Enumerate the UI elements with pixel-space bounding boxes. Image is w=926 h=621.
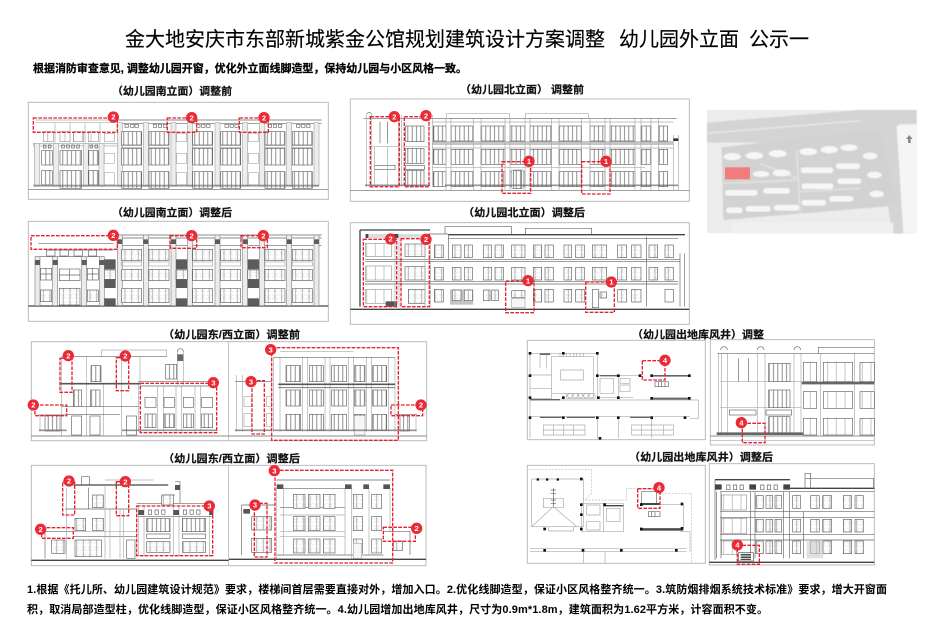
callout 2: upper middle: 2 xyxy=(123,477,127,486)
callout 2: second tower xyxy=(401,234,432,307)
callout 2: left tower: 2 xyxy=(392,112,396,121)
callout 2: right roof: 2 xyxy=(261,231,265,240)
panel: ventilation shaft before, floor plan xyxy=(527,340,705,440)
title xyxy=(125,28,809,51)
callout 1: entrance xyxy=(506,275,534,313)
callout 4: shaft location on plan xyxy=(638,482,665,508)
callout 2: right roof xyxy=(241,230,269,248)
callout 2: left tower: 2 xyxy=(389,235,393,244)
callout 4: new shaft: 4 xyxy=(735,541,740,550)
callout 3: right wing xyxy=(140,377,219,433)
heading: east/west elevation before: （幼儿园东/西立面）调整前 xyxy=(163,328,301,341)
callout 2: second tower xyxy=(404,110,432,187)
callout 2: left wing roof xyxy=(35,524,73,538)
heading: north elevation after: （幼儿园北立面）调整后 xyxy=(463,206,586,219)
panel: east/west elevation before xyxy=(28,342,427,441)
panel: ventilation shaft after, elevation xyxy=(709,464,874,565)
panel: east/west elevation after xyxy=(31,465,426,566)
callout 3: right wing: 3 xyxy=(211,378,215,387)
callout 2: right wing roof xyxy=(383,523,422,541)
panel: ventilation shaft after, floor plan xyxy=(527,465,705,563)
title: 金大地安庆市东部新城紫金公馆规划建筑设计方案调整 xyxy=(125,28,605,51)
callout 1: entrance xyxy=(502,156,535,193)
panel: south elevation after xyxy=(28,221,328,321)
callout 2: upper left corner xyxy=(60,350,74,392)
callout 2: left roof xyxy=(31,230,119,249)
callout 4: shaft location on plan: 4 xyxy=(663,356,668,365)
callout 1: second entrance: 1 xyxy=(604,157,609,166)
callout 2: middle roof: 2 xyxy=(190,113,194,122)
callout 1: entrance: 1 xyxy=(526,276,531,285)
subtitle: adjustment summary: 根据消防审查意见, 调整幼儿园开窗，优化外立面线脚造型，保持幼儿园与小区风格一致。 xyxy=(33,61,467,75)
callout 4: shaft location on elevation xyxy=(736,417,765,443)
callout 3: left pier: 3 xyxy=(253,501,257,510)
note text: adjustment explanation: 1.根据《托儿所、幼儿园建筑设计规范》要求，楼梯间首层需要直接对外，增加入口。2.优化线脚造型，保证小区风格整齐统一。3.筑防烟排烟系统技术标准》要求，增大开窗面 xyxy=(27,582,887,596)
callout 2: upper middle xyxy=(116,350,131,391)
callout 3: left pier xyxy=(249,499,267,557)
callout 2: right roof xyxy=(239,112,270,132)
callout 3: main facade xyxy=(269,465,393,563)
heading: south elevation before: （幼儿园南立面）调整前 xyxy=(112,84,233,98)
callout 3: main facade: 3 xyxy=(272,466,276,475)
panel: north elevation after xyxy=(350,223,689,324)
callout 1: second entrance: 1 xyxy=(609,278,614,287)
callout 2: right wing roof: 2 xyxy=(415,524,419,533)
callout 2: right wing roof: 2 xyxy=(419,401,423,410)
heading: ventilation shaft after: （幼儿园出地库风井）调整后 xyxy=(629,450,774,464)
callout 2: middle roof: 2 xyxy=(190,231,194,240)
callout 2: upper middle: 2 xyxy=(123,352,127,361)
callout 2: upper left corner xyxy=(63,475,75,515)
highlighted kindergarten block xyxy=(725,167,750,179)
callout 3: main facade xyxy=(265,344,398,440)
note text: adjustment explanation: 积，取消局部造型柱，优化线脚造型，保证小区风格整齐统一。4.幼儿园增加出地库风井，尺寸为0.9m*1.8m，建筑面积为1.62平方米，计容面积不变。 xyxy=(27,602,768,616)
panel: north elevation before xyxy=(350,99,689,201)
callout 3: left pier: 3 xyxy=(249,377,253,386)
callout 3: main facade: 3 xyxy=(269,345,273,354)
callout 3: left pier xyxy=(245,376,264,434)
callout 4: new shaft xyxy=(732,539,759,564)
title: 公示一 xyxy=(749,29,809,51)
callout 2: right wing roof xyxy=(391,399,427,416)
callout 2: left roof: 2 xyxy=(111,231,115,240)
title: 幼儿园外立面 xyxy=(619,28,739,51)
callout 2: right roof: 2 xyxy=(262,113,266,122)
heading: south elevation after: （幼儿园南立面）调整后 xyxy=(112,206,233,219)
callout 2: upper left corner: 2 xyxy=(66,351,70,360)
callout 4: shaft location on plan xyxy=(642,355,671,380)
callout 3: right wing xyxy=(137,500,215,556)
heading: east/west elevation after: （幼儿园东/西立面）调整后 xyxy=(163,452,301,465)
callout 2: second tower: 2 xyxy=(424,235,428,244)
callout 2: upper left corner: 2 xyxy=(67,477,71,486)
callout 1: second entrance xyxy=(586,276,617,312)
callout 2: left tower xyxy=(370,111,400,187)
callout 1: entrance: 1 xyxy=(527,157,532,166)
callout 2: middle roof xyxy=(170,230,197,248)
heading: ventilation shaft before: （幼儿园出地库风井）调整 xyxy=(632,328,765,341)
callout 4: shaft location on elevation: 4 xyxy=(739,418,744,427)
callout 2: left roof: 2 xyxy=(111,113,115,122)
panel: ventilation shaft before, elevation xyxy=(710,340,874,445)
note text: adjustment explanation xyxy=(27,582,887,616)
callout 3: right wing: 3 xyxy=(207,502,211,511)
site plan map xyxy=(707,110,917,233)
callout 2: left wing roof: 2 xyxy=(39,525,43,534)
heading: north elevation before: （幼儿园北立面） 调整前 xyxy=(460,83,585,96)
callout 2: upper middle xyxy=(116,476,131,516)
panel: south elevation before xyxy=(28,102,328,199)
callout 2: second tower: 2 xyxy=(424,111,428,120)
callout 2: left roof xyxy=(33,111,119,132)
callout 2: left wing roof xyxy=(28,399,67,416)
callout 1: second entrance xyxy=(582,156,612,194)
callout 2: middle roof xyxy=(167,112,197,132)
callout 2: left tower xyxy=(363,233,397,307)
callout 4: shaft location on plan: 4 xyxy=(657,483,662,492)
callout 2: left wing roof: 2 xyxy=(31,401,35,410)
